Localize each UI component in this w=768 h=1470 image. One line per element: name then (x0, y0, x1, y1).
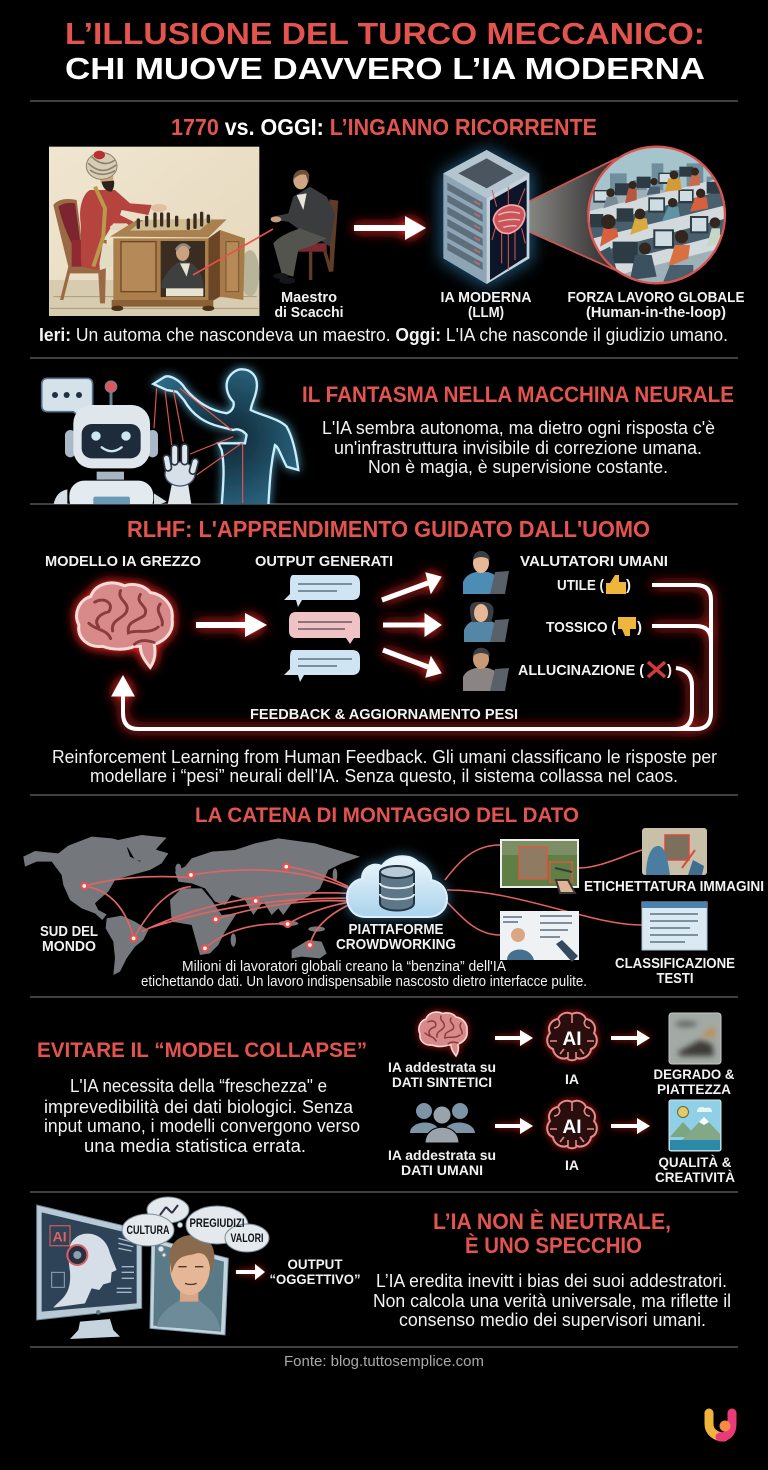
verdict: useful: ) (626, 577, 631, 594)
heading: AI is a mirror: L’IA NON È NEUTRALE, (433, 1209, 671, 1234)
caption: etichettando dati. Un lavoro indispensabile nascosto dietro interfacce pulite. (141, 974, 587, 990)
column labels: MODELLO IA GREZZO (45, 553, 201, 570)
feedback label: FEEDBACK & AGGIORNAMENTO PESI (250, 706, 518, 723)
body text: consenso medio dei supervisori umani. (399, 1310, 706, 1330)
thought clouds: PREGIUDIZI (190, 1216, 244, 1230)
body text (44, 1076, 360, 1156)
label: text classification: TESTI (656, 970, 694, 987)
column labels: OUTPUT GENERATI (255, 553, 393, 570)
verdict: useful: UTILE ( (557, 577, 604, 594)
label: quality: CREATIVITÀ (655, 1169, 735, 1185)
label: synthetic data: IA addestrata su (388, 1059, 496, 1075)
label: degradation (654, 1066, 734, 1097)
feedback loop arrow (112, 585, 711, 729)
body text: L’IA eredita inevitt i bias dei suoi addestratori. (376, 1271, 727, 1291)
label: global workforce (568, 289, 744, 321)
label: degradation: PIATTEZZA (657, 1081, 731, 1097)
label: quality (655, 1154, 735, 1185)
illustration: monitor with AI face (37, 1205, 142, 1339)
label: global south: SUD DEL (40, 924, 98, 940)
panel: AI is a mirror (37, 1197, 731, 1339)
network lines (84, 867, 348, 948)
title (65, 16, 705, 86)
body text: input umano, i modelli convergono verso (44, 1116, 360, 1136)
heading: ghost in the machine: IL FANTASMA NELLA MACCHINA NEURALE (302, 382, 734, 407)
arrow (495, 1030, 533, 1046)
body text (322, 418, 715, 477)
illustration: server with magnifying cone (440, 145, 727, 288)
worker location markers (81, 864, 313, 951)
label: objective output: OUTPUT (288, 1256, 343, 1272)
column labels: VALUTATORI UMANI (520, 553, 668, 570)
heading: AI is a mirror (433, 1209, 671, 1258)
card: classified text document (642, 902, 707, 950)
card: image annotation (500, 839, 579, 893)
label: modern AI: IA MODERNA (440, 289, 532, 306)
row: human data (388, 1100, 735, 1185)
icon: AI brain (547, 1101, 597, 1148)
image: mountain landscape (669, 1100, 721, 1151)
icon: cloud database (347, 856, 447, 917)
puppet strings (154, 388, 243, 503)
heading: RLHF: RLHF: L'APPRENDIMENTO GUIDATO DALL'UOMO (127, 516, 650, 542)
label: modern AI (440, 289, 532, 321)
body text: un'infrastruttura invisibile di correzione umana. (334, 438, 702, 458)
illustration: robot and ghost puppeteer (42, 369, 298, 514)
heading: data assembly line: LA CATENA DI MONTAGGIO DEL DATO (195, 804, 579, 827)
illustration: monitor with AI face: AI (53, 1229, 67, 1245)
label: global workforce: FORZA LAVORO GLOBALE (568, 289, 744, 306)
ghost figure (153, 369, 298, 507)
icon: brain (419, 1012, 467, 1056)
thought clouds (122, 1197, 269, 1257)
arrow (611, 1030, 650, 1046)
source: Fonte: blog.tuttosemplice.com (284, 1354, 484, 1370)
arrow: output (236, 1264, 265, 1280)
caption: Ieri: Un automa che nascondeva un maestro. Oggi: L'IA che nasconde il giudizio umano. (39, 325, 728, 345)
icon: raw brain (77, 583, 172, 667)
image: blurred degraded result (669, 1013, 721, 1064)
card: text annotation (500, 911, 579, 962)
verdict: toxic: ) (637, 619, 642, 636)
human evaluator 2 (464, 602, 509, 642)
label: degradation: DEGRADO & (654, 1066, 734, 1082)
label: synthetic data (388, 1059, 496, 1090)
label: synthetic data: DATI SINTETICI (392, 1074, 492, 1090)
world map (23, 835, 360, 975)
arrow: past to present (354, 216, 426, 240)
body text (373, 1271, 731, 1330)
label: quality: QUALITÀ & (658, 1154, 732, 1170)
verdict: toxic: TOSSICO ( (546, 619, 616, 636)
thought clouds: CULTURA (126, 1223, 170, 1237)
arrows: outputs to evaluators (382, 573, 441, 677)
label: crowdworking platforms: CROWDWORKING (336, 936, 456, 953)
arrow (611, 1118, 650, 1134)
heading: model collapse: EVITARE IL “MODEL COLLAPSE” (37, 1039, 367, 1062)
chat bubbles (284, 575, 366, 682)
caption: Reinforcement Learning from Human Feedback. Gli umani classificano le risposte per (52, 747, 717, 767)
label: chess master: Maestro (281, 289, 337, 306)
verdict: hallucination: ALLUCINAZIONE ( (518, 662, 644, 679)
thought clouds: VALORI (230, 1231, 264, 1245)
label: crowdworking platforms: PIATTAFORME (348, 921, 444, 938)
label: global south: MONDO (42, 939, 96, 955)
arrow (495, 1118, 533, 1134)
label: crowdworking platforms (336, 921, 456, 953)
panel: ghost in the machine (42, 369, 734, 514)
label: human data: DATI UMANI (401, 1162, 483, 1178)
body text: una media statistica errata. (84, 1136, 306, 1156)
label: AI: IA (565, 1071, 579, 1087)
title: L’ILLUSIONE DEL TURCO MECCANICO: (65, 16, 705, 51)
label: chess master: di Scacchi (274, 304, 344, 321)
label: AI: IA (565, 1157, 579, 1173)
human evaluator 3 (463, 648, 509, 691)
icon: AI brain (547, 1013, 597, 1060)
heading: 1770 vs oggi: 1770 vs. OGGI: L’INGANNO RICORRENTE (171, 114, 597, 140)
caption (141, 959, 587, 990)
label: chess master (274, 289, 344, 321)
label: global workforce: (Human-in-the-loop) (586, 304, 726, 321)
logo (709, 1413, 732, 1437)
caption: modellare i “pesi” neurali dell’IA. Senza questo, il sistema collassa nel caos. (90, 766, 678, 786)
illustration: mirror with human (150, 1235, 228, 1335)
robot speech bubble (42, 378, 93, 420)
body text: L'IA sembra autonoma, ma dietro ogni risposta c'è (322, 418, 715, 438)
body text: imprevedibilità dei dati biologici. Senza (44, 1097, 354, 1117)
title: CHI MUOVE DAVVERO L’IA MODERNA (65, 51, 705, 86)
row: synthetic data (388, 1012, 734, 1097)
panel: model collapse (37, 1012, 735, 1185)
caption (52, 747, 717, 786)
red connecting line (193, 229, 273, 275)
panel: data assembly line (23, 804, 764, 990)
label: text classification: CLASSIFICAZIONE (615, 955, 735, 972)
illustration: mechanical turk engraving (49, 147, 338, 316)
human evaluator 1 (463, 551, 509, 594)
label: text classification (615, 955, 735, 987)
label: global south (40, 924, 98, 955)
icon: people (410, 1103, 475, 1143)
label: human data (388, 1147, 496, 1178)
column labels (45, 553, 668, 570)
panel: RLHF (45, 516, 717, 786)
label: objective output (270, 1256, 360, 1287)
platform links (445, 845, 642, 935)
panel: 1770 vs oggi (39, 114, 744, 345)
workforce circle (587, 145, 727, 287)
body text: Non calcola una verità universale, ma riflette il (373, 1291, 731, 1311)
verdict: useful (557, 575, 631, 594)
chess master figure (270, 170, 338, 284)
arrow: model to outputs (196, 613, 267, 637)
card: image labelling result (642, 828, 707, 875)
heading: AI is a mirror: È UNO SPECCHIO (465, 1233, 642, 1258)
label: human data: IA addestrata su (388, 1147, 496, 1163)
caption: Milioni di lavoratori globali creano la “benzina” dell'IA (182, 959, 506, 975)
robot (53, 381, 199, 514)
body text: Non è magia, è supervisione costante. (368, 457, 668, 477)
verdict: hallucination: ) (667, 662, 672, 679)
label: modern AI: (LLM) (468, 304, 504, 321)
label: objective output: “OGGETTIVO” (270, 1271, 360, 1287)
body text: L'IA necessita della “freschezza" e (70, 1076, 327, 1096)
